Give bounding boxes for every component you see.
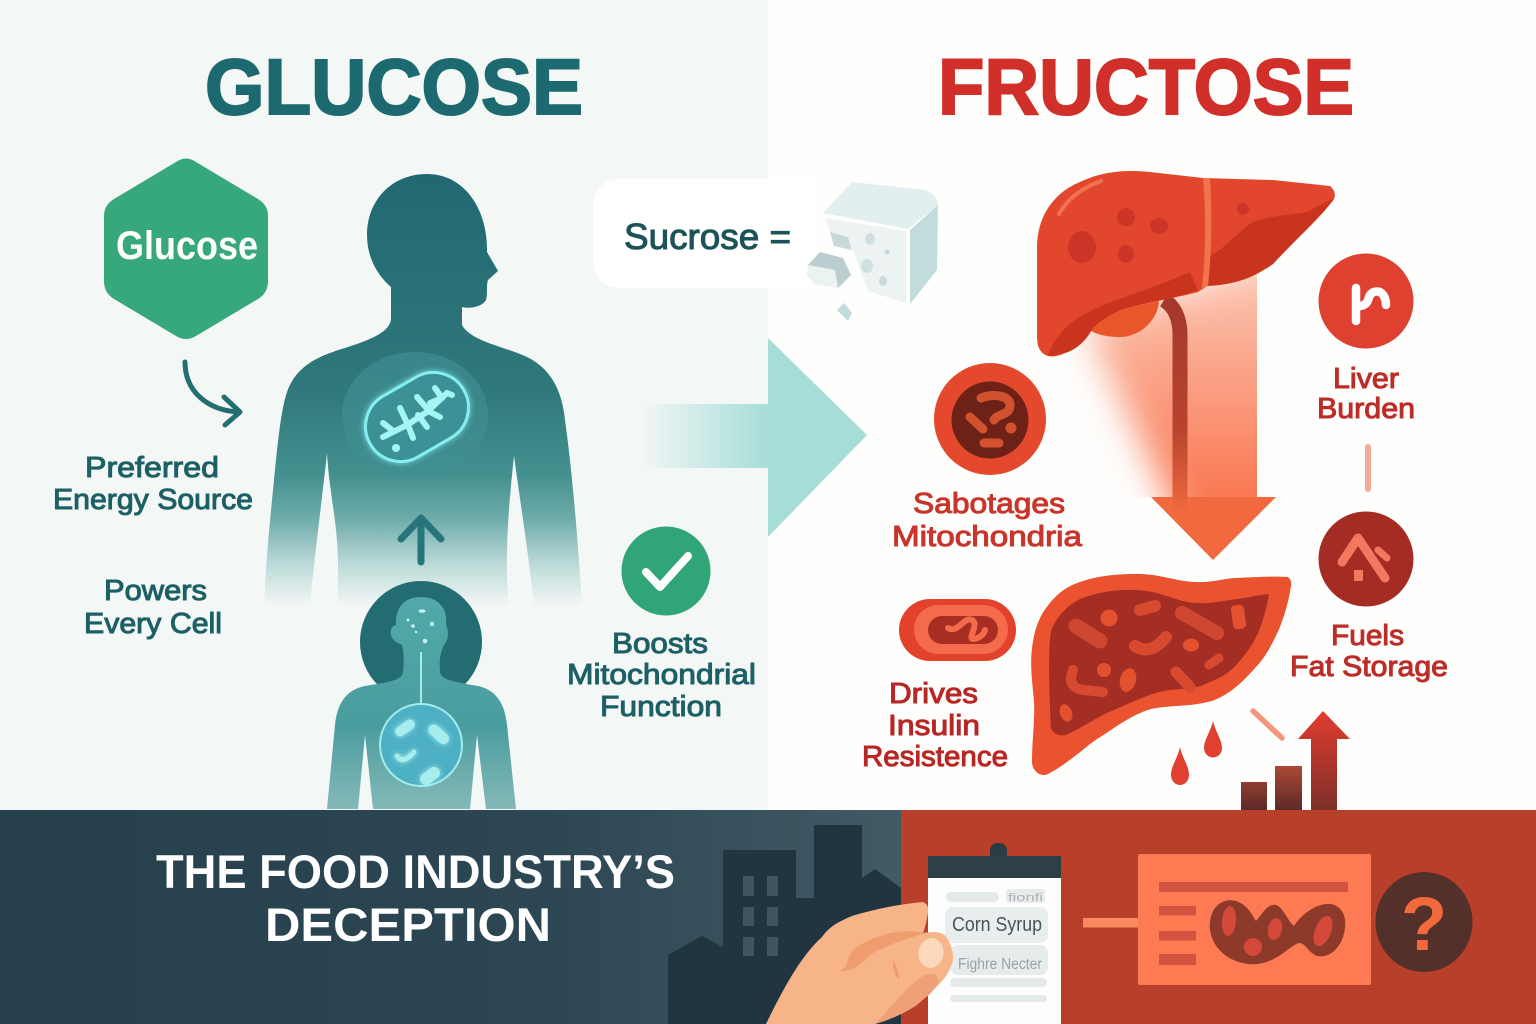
arrow: up to large body xyxy=(401,518,441,562)
icon: hand holding card xyxy=(766,902,953,1024)
icon: ingredient label card: fionfi xyxy=(1008,892,1043,904)
connector: card to panel xyxy=(1083,918,1139,928)
icon: blood drops xyxy=(1171,721,1222,785)
label: sucrose box xyxy=(593,179,815,288)
text: drives insulin resistence: Insulin xyxy=(888,710,980,742)
icon: fatty liver xyxy=(1031,574,1291,775)
title: glucose: GLUCOSE xyxy=(205,42,583,131)
icon: green check xyxy=(622,526,710,616)
text: powers every cell xyxy=(84,575,222,640)
arrow: glucose to energy xyxy=(185,362,240,425)
icon: question mark badge: ? xyxy=(1401,882,1447,967)
icon: fat storage badge xyxy=(1318,512,1414,606)
heading: the food industry's deception xyxy=(156,845,675,951)
arrow: teal sucrose arrow xyxy=(640,338,867,537)
icon: damaged mitochondria badge xyxy=(934,363,1046,475)
heading: the food industry's deception: DECEPTION xyxy=(265,898,551,951)
title: fructose: FRUCTOSE xyxy=(938,42,1354,131)
text: fuels fat storage: Fuels xyxy=(1331,620,1404,652)
icon: mitochondrion pill xyxy=(899,599,1016,661)
figure: small human with gut xyxy=(327,581,516,809)
text: preferred energy source: Preferred xyxy=(85,452,219,484)
text: liver burden: Burden xyxy=(1317,393,1415,425)
text: boosts mitochondrial function xyxy=(567,628,756,723)
panel: fructose background xyxy=(768,0,1536,810)
icon: broken sugar cube xyxy=(807,182,938,321)
connector: burden to fat storage xyxy=(1365,444,1371,492)
icon: ingredient label card xyxy=(928,843,1061,1024)
heading: the food industry's deception: THE FOOD INDUSTRY’S xyxy=(156,845,675,898)
text: boosts mitochondrial function: Function xyxy=(600,691,722,723)
icon: glucose hexagon: Glucose xyxy=(116,224,258,268)
text: liver burden: Liver xyxy=(1333,363,1399,395)
text: drives insulin resistence xyxy=(862,678,1008,773)
icon: ingredient label card: Fighre Necter xyxy=(958,956,1042,973)
icon: glowing mitochondrion xyxy=(342,352,488,478)
icon: rising bars and arrow xyxy=(1241,711,1350,810)
icon: city skyline xyxy=(668,825,901,1024)
panel: liver report xyxy=(1138,854,1371,985)
icon: liver burden badge xyxy=(1318,254,1414,348)
text: boosts mitochondrial function: Mitochondrial xyxy=(567,659,756,691)
text: sabotages mitochondria xyxy=(892,488,1083,553)
icon: question mark badge xyxy=(1376,872,1472,972)
text: sabotages mitochondria: Mitochondria xyxy=(892,521,1083,553)
text: powers every cell: Powers xyxy=(104,575,207,607)
panel: fructose deception band xyxy=(901,810,1536,1024)
panel: food industry band xyxy=(0,810,901,1024)
text: fuels fat storage xyxy=(1290,620,1448,683)
panel: glucose background xyxy=(0,0,768,810)
icon: glucose hexagon xyxy=(104,158,268,339)
text: liver burden xyxy=(1317,363,1415,425)
text: preferred energy source: Energy Source xyxy=(53,484,253,516)
text: sabotages mitochondria: Sabotages xyxy=(913,488,1065,520)
text: drives insulin resistence: Drives xyxy=(889,678,978,710)
text: boosts mitochondrial function: Boosts xyxy=(612,628,708,660)
arrow: large orange downward arrow xyxy=(1072,274,1276,560)
text: drives insulin resistence: Resistence xyxy=(862,741,1008,773)
text: fuels fat storage: Fat Storage xyxy=(1290,651,1448,683)
text: preferred energy source xyxy=(53,452,253,516)
figure: large human silhouette xyxy=(264,174,582,606)
icon: healthy-looking liver xyxy=(1037,171,1335,356)
label: sucrose box: Sucrose = xyxy=(624,216,791,257)
text: powers every cell: Every Cell xyxy=(84,608,222,640)
icon: ingredient label card: Corn Syrup xyxy=(952,914,1042,936)
icon: vein between livers xyxy=(1164,300,1180,512)
